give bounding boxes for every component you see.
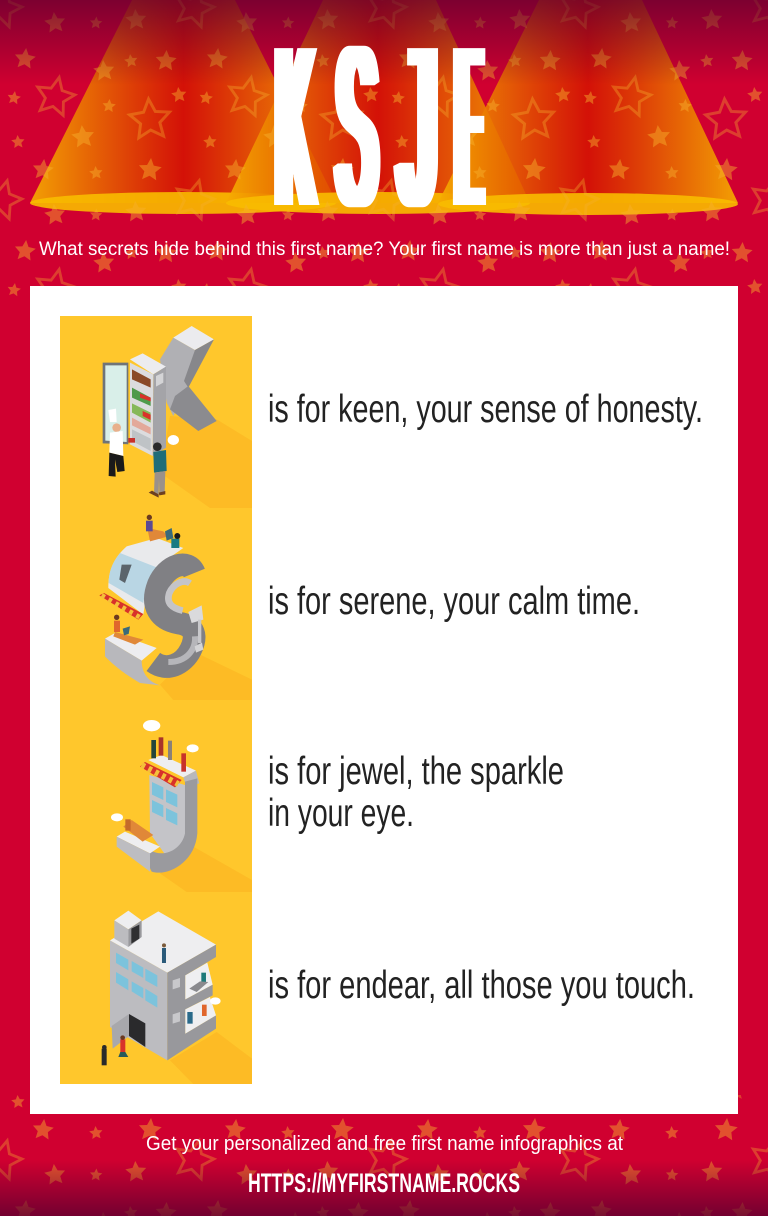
- footer url: HTTPS://MYFIRSTNAME.ROCKS: [248, 1168, 520, 1198]
- title: S: [337, 0, 376, 254]
- icon: letter K with fridge: [103, 326, 252, 508]
- panel: letters: [30, 286, 738, 1114]
- icon: letter E building: [102, 911, 252, 1084]
- title: J: [399, 0, 437, 253]
- title: E: [457, 0, 481, 254]
- text: J line: [268, 750, 564, 835]
- text: J line: is for jewel, the sparkle: [268, 750, 564, 793]
- bottom shade: [0, 1160, 768, 1216]
- title: [277, 0, 481, 255]
- icon: letter S with offices: [99, 515, 252, 700]
- text: J line: in your eye.: [268, 792, 414, 835]
- icon: letter J with rooftop people: [111, 720, 252, 892]
- top shade: [0, 0, 768, 85]
- spotlights: [30, 0, 738, 215]
- title: K: [277, 0, 313, 255]
- footer text: Get your personalized and free first name infographics at: [146, 1133, 623, 1155]
- text: S line: is for serene, your calm time.: [268, 580, 640, 623]
- subtitle: What secrets hide behind this first name? Your first name is more than just a name!: [39, 239, 730, 260]
